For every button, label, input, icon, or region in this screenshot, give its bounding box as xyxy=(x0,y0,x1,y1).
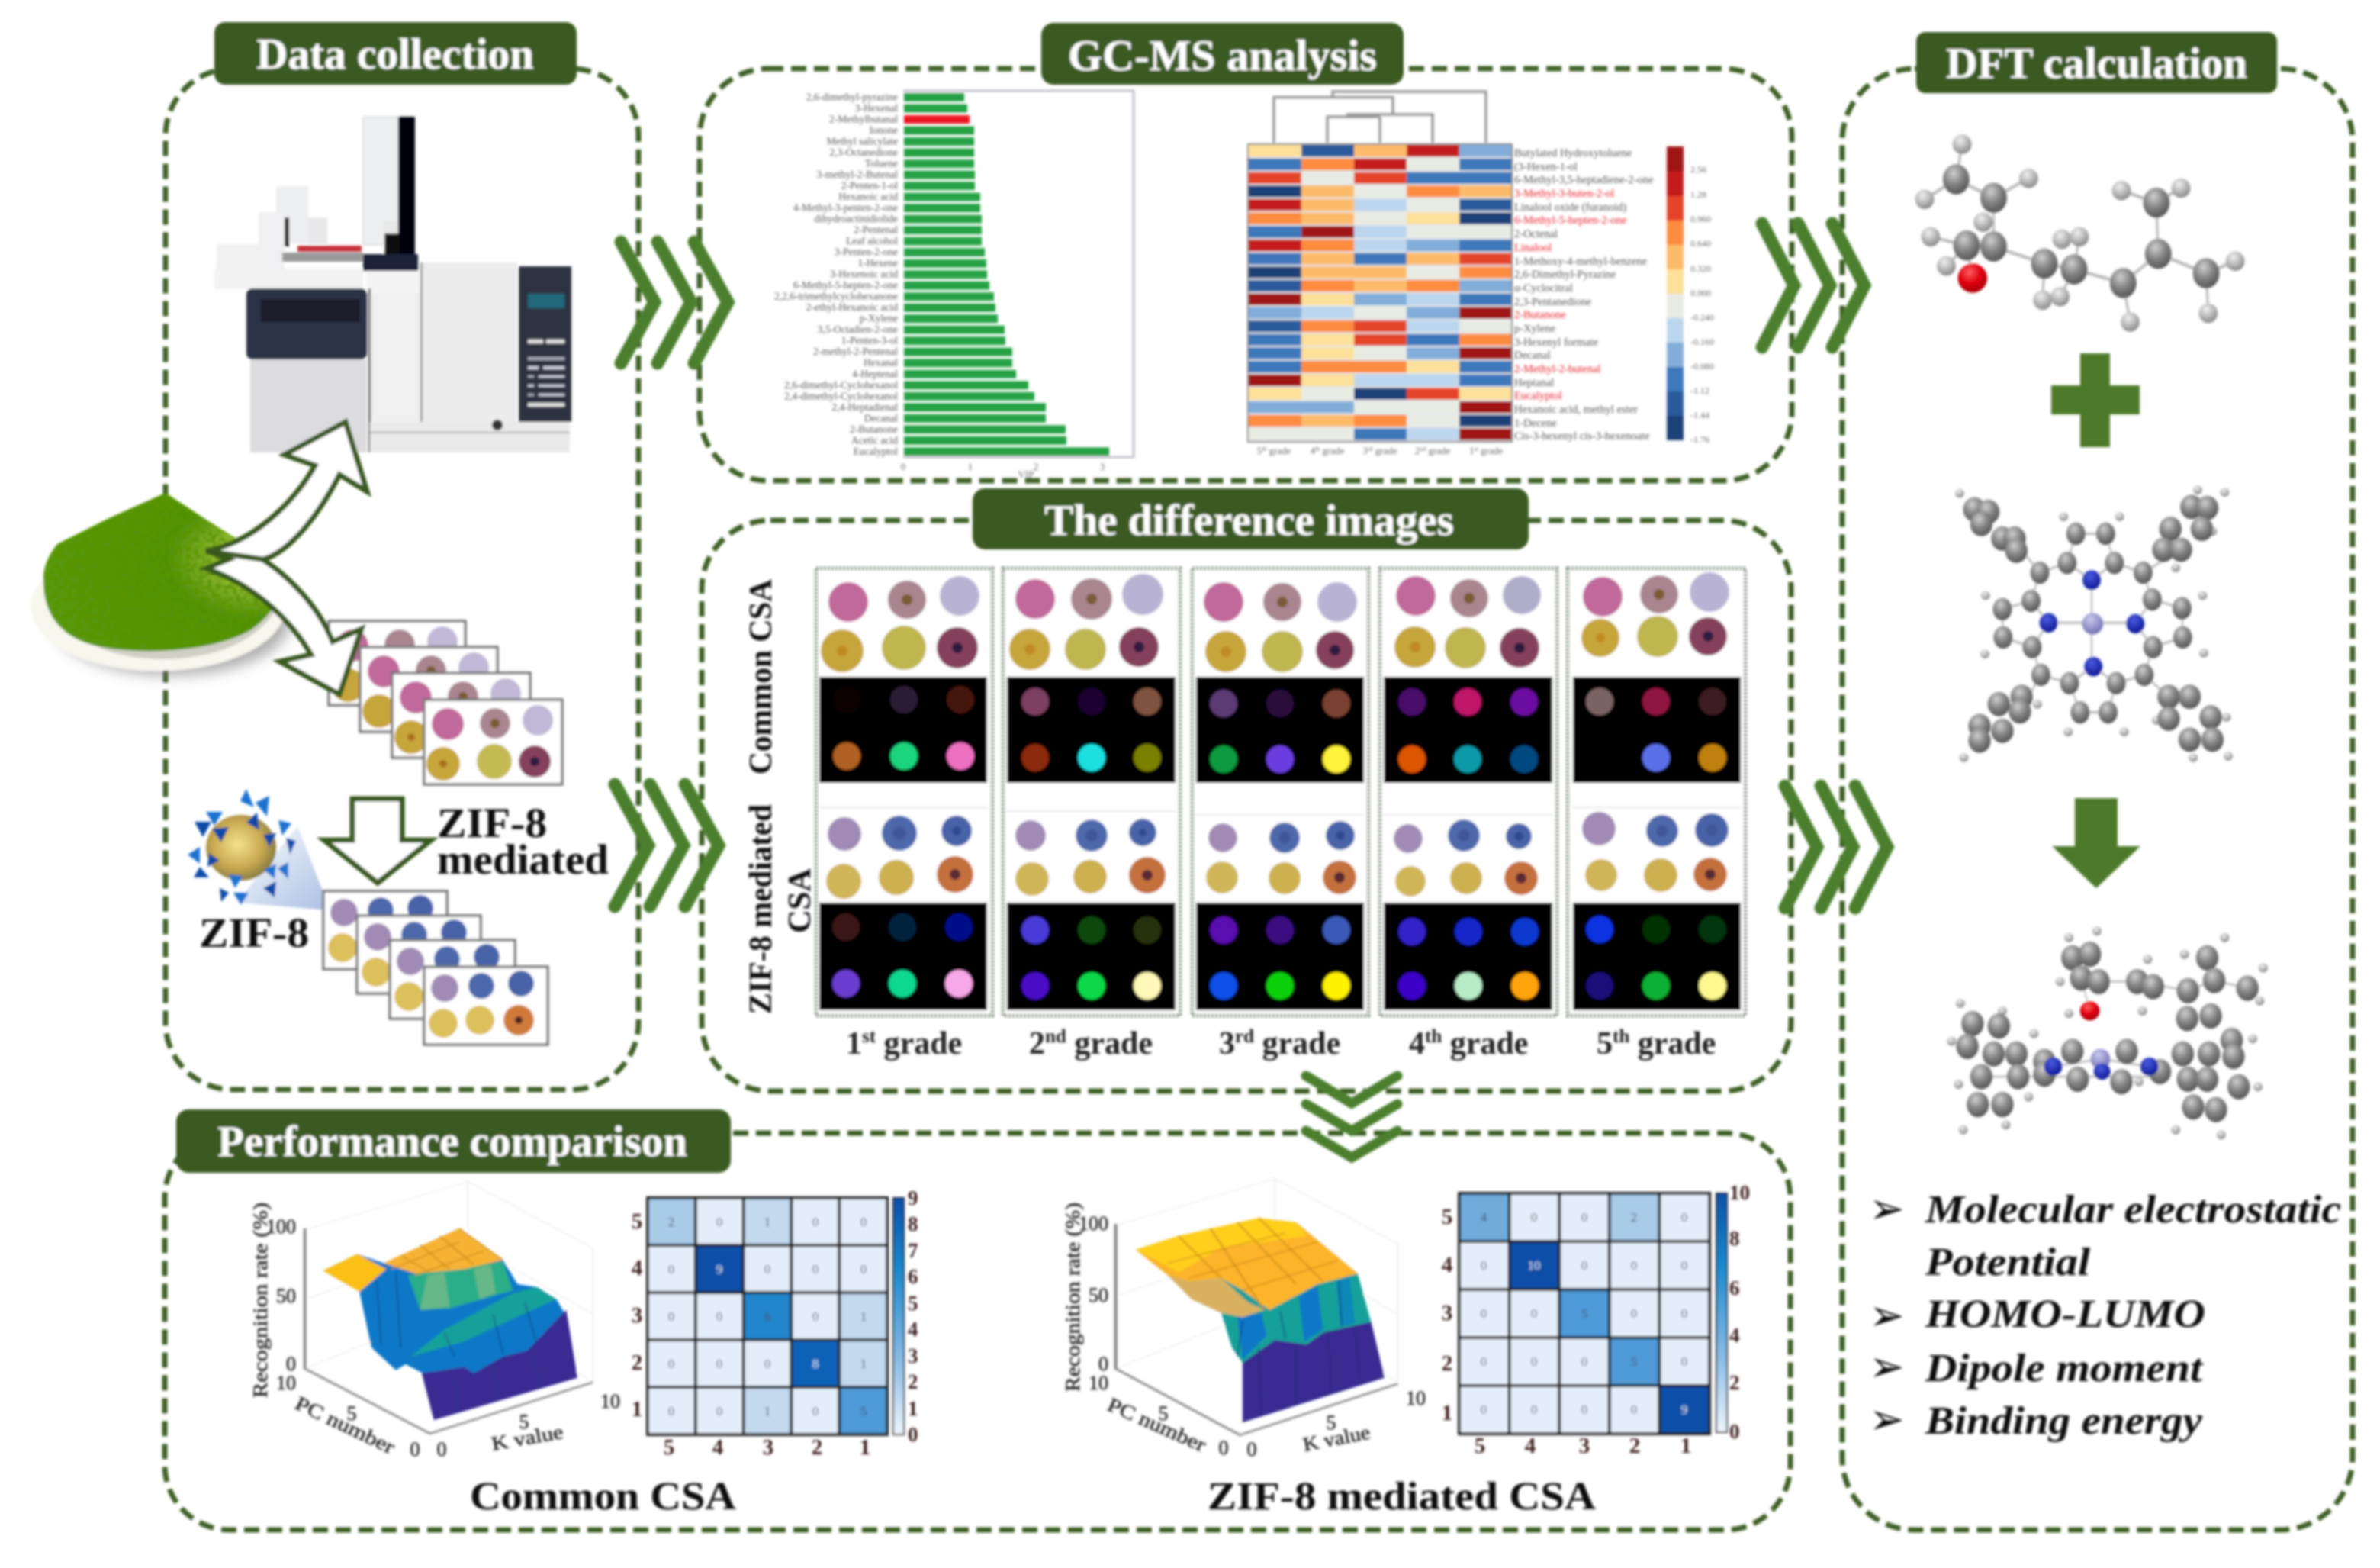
chart: VIP bar chart: 0 xyxy=(901,461,905,472)
chart: common CSA recognition surface: 100 xyxy=(266,1215,296,1238)
arrow: powder to colour arrays xyxy=(206,551,562,784)
side label: ZIF-8 mediated CSA xyxy=(744,804,818,1014)
icon: matcha powder in bowl xyxy=(31,493,290,675)
chart: heatmap with dendrogram: Linalool xyxy=(1514,242,1552,254)
chart: ZIF-8 CSA recognition surface: 0 xyxy=(1219,1437,1228,1459)
chart: ZIF-8 CSA recognition surface: 10 xyxy=(1089,1372,1108,1394)
chart: VIP bar chart: 2,3-Octanedione xyxy=(829,146,898,158)
list: DFT outputs: Binding energy xyxy=(1925,1399,2203,1443)
chart: VIP bar chart: Eucalyptol xyxy=(854,446,898,457)
chart: common CSA recognition surface xyxy=(249,1182,620,1460)
chart: VIP bar chart: Decanal xyxy=(864,412,898,423)
chart: ZIF-8 CSA recognition surface: 5 xyxy=(1326,1412,1336,1434)
chart: VIP bar chart: 3,5-Octadien-2-one xyxy=(818,324,898,335)
panel: DFT calculation xyxy=(1842,69,2353,1530)
chart: VIP bar chart: 3 xyxy=(1100,461,1105,472)
molecule: adsorption complex xyxy=(1947,926,2268,1139)
chart: ZIF-8 CSA confusion matrix: 0 xyxy=(1481,1258,1487,1273)
colour scale: -0.160 xyxy=(1690,336,1714,347)
chart: common CSA recognition surface: PC number xyxy=(291,1392,398,1459)
chart: common CSA confusion matrix: 7 xyxy=(908,1239,918,1262)
chart: heatmap with dendrogram: 2 xyxy=(1415,445,1420,456)
chart: common CSA confusion matrix: 1 xyxy=(764,1404,770,1418)
grade labels: grade xyxy=(1442,1026,1528,1061)
chart: common CSA confusion matrix: 0 xyxy=(668,1357,674,1371)
arrow: difference images to performance xyxy=(1306,1076,1397,1157)
chart: ZIF-8 CSA confusion matrix xyxy=(1442,1181,1750,1458)
chart: common CSA confusion matrix: 0 xyxy=(764,1357,770,1371)
heading: DFT calculation: DFT calculation xyxy=(1946,40,2247,88)
chart: common CSA confusion matrix: 5 xyxy=(860,1404,867,1418)
arrow: difference images to DFT xyxy=(1785,786,1887,908)
chart: VIP bar chart: Hexanoic acid xyxy=(838,191,898,202)
chart: heatmap with dendrogram: 1 xyxy=(1469,445,1475,456)
chart: common CSA confusion matrix: 0 xyxy=(812,1215,819,1229)
grade labels: grade xyxy=(1254,1026,1340,1061)
arrow: powder to instrument xyxy=(206,422,367,559)
dendrogram xyxy=(1274,92,1486,145)
chart: VIP bar chart xyxy=(774,91,1134,480)
arrow: down to complex xyxy=(2052,798,2140,888)
list: DFT outputs: ➢ xyxy=(1869,1184,1905,1234)
chart: common CSA confusion matrix: 0 xyxy=(860,1262,867,1277)
chart: VIP bar chart: 2 xyxy=(1034,461,1038,472)
chart: heatmap with dendrogram: α-Cyclocitral xyxy=(1514,282,1573,295)
chart: VIP bar chart: dihydroactinidiolide xyxy=(815,213,898,224)
difference image column: 5th grade xyxy=(1568,568,1745,1016)
chart: common CSA confusion matrix: 4 xyxy=(632,1256,642,1280)
chart: common CSA recognition surface: 50 xyxy=(276,1285,296,1307)
panel: GC-MS analysis xyxy=(700,69,1792,481)
chart: common CSA confusion matrix: 1 xyxy=(860,1435,870,1460)
chart: VIP bar chart: VIP xyxy=(1018,468,1034,480)
chart: common CSA confusion matrix: 4 xyxy=(908,1318,918,1341)
heading: Performance comparison xyxy=(176,1109,731,1173)
chart: ZIF-8 CSA recognition surface: 0 xyxy=(1246,1438,1257,1460)
chart: heatmap with dendrogram: Linalool oxide (furanoid) xyxy=(1514,201,1627,214)
heading: Data collection xyxy=(214,22,577,85)
chart: heatmap with dendrogram: 6-Methyl-3,5-heptadiene-2-one xyxy=(1514,174,1653,186)
chart: heatmap with dendrogram: Heptanal xyxy=(1514,377,1554,389)
chart: ZIF-8 CSA confusion matrix: 0 xyxy=(1631,1306,1637,1321)
chart: ZIF-8 CSA confusion matrix: 10 xyxy=(1729,1181,1750,1204)
chart: common CSA confusion matrix: 0 xyxy=(716,1357,722,1371)
chart: VIP bar chart: 2,6-dimethyl-Cyclohexanol xyxy=(784,379,898,391)
chart: VIP bar chart: 3-methyl-2-Butenal xyxy=(817,169,898,180)
colour scale: -0.080 xyxy=(1690,361,1714,372)
chart: ZIF-8 CSA confusion matrix: 5 xyxy=(1442,1205,1452,1229)
colour scale xyxy=(1667,146,1714,445)
chart: VIP bar chart: 2-ethyl-Hexanoic acid xyxy=(806,301,898,313)
list: DFT outputs: ➢ xyxy=(1869,1395,1905,1444)
chart: ZIF-8 CSA confusion matrix: 1 xyxy=(1680,1434,1691,1458)
chart: ZIF-8 CSA confusion matrix: 0 xyxy=(1681,1306,1687,1321)
list: DFT outputs: Dipole moment xyxy=(1925,1347,2204,1390)
difference image column: 2nd grade xyxy=(1003,568,1180,1016)
chart: ZIF-8 CSA confusion matrix: 0 xyxy=(1531,1210,1537,1225)
chart: ZIF-8 CSA confusion matrix: 0 xyxy=(1631,1258,1637,1273)
plate stack: common CSA xyxy=(329,621,562,784)
chart: ZIF-8 CSA confusion matrix: 2 xyxy=(1629,1434,1640,1458)
chart: heatmap with dendrogram: Eucalyptol xyxy=(1514,390,1562,402)
chart: common CSA confusion matrix: 1 xyxy=(908,1397,918,1420)
grade labels: grade xyxy=(1066,1026,1153,1061)
chart: common CSA confusion matrix: 6 xyxy=(908,1265,918,1288)
chart: VIP bar chart: 2,4-Heptadienal xyxy=(831,401,898,413)
chart: common CSA confusion matrix: 6 xyxy=(764,1309,770,1324)
plate stack: ZIF-8 mediated CSA xyxy=(323,891,548,1045)
chart: heatmap with dendrogram: Decanal xyxy=(1514,349,1550,362)
grade labels: nd xyxy=(1045,1026,1066,1047)
chart: ZIF-8 CSA recognition surface xyxy=(1062,1179,1426,1460)
chart: heatmap with dendrogram: 2-Butanone xyxy=(1514,309,1566,321)
chart: common CSA confusion matrix: 0 xyxy=(812,1262,819,1277)
chart: heatmap with dendrogram: grade xyxy=(1478,445,1503,456)
heading: The difference images xyxy=(973,488,1529,549)
chart: heatmap with dendrogram: 2,6-Dimethyl-Pyrazine xyxy=(1514,269,1616,281)
label: ZIF-8: ZIF-8 xyxy=(199,910,309,956)
chart: heatmap with dendrogram: 2,3-Pentanedione xyxy=(1514,296,1591,308)
chart: common CSA confusion matrix: 0 xyxy=(812,1404,819,1418)
chart: common CSA recognition surface: 10 xyxy=(276,1372,296,1394)
chart: common CSA confusion matrix: 2 xyxy=(908,1370,918,1393)
label: ZIF-8 mediated: ZIF-8 xyxy=(437,800,547,846)
chart: heatmap with dendrogram: grade xyxy=(1266,445,1291,456)
chart: ZIF-8 CSA confusion matrix: 4 xyxy=(1729,1324,1739,1347)
chart: VIP bar chart: 1 xyxy=(968,461,973,472)
chart: common CSA confusion matrix: 9 xyxy=(716,1262,722,1277)
chart: VIP bar chart: Methyl salicylate xyxy=(827,136,898,146)
chart: ZIF-8 CSA confusion matrix: 2 xyxy=(1631,1210,1637,1225)
chart: VIP bar chart: 2-Pentenal xyxy=(854,224,898,236)
icon: GC-MS instrument xyxy=(214,117,571,452)
chart: common CSA confusion matrix: 0 xyxy=(764,1262,770,1277)
difference image column: 3rd grade xyxy=(1192,568,1368,1016)
heading: The difference images: The difference images xyxy=(1044,497,1454,545)
colour scale: -1.12 xyxy=(1690,385,1709,396)
chart: heatmap with dendrogram: 3 xyxy=(1362,445,1368,456)
chart: VIP bar chart: 2,2,6-trimethylcyclohexanone xyxy=(774,291,898,302)
chart: common CSA confusion matrix: 3 xyxy=(908,1344,918,1367)
chart: common CSA confusion matrix: 5 xyxy=(908,1292,918,1315)
panel: performance comparison xyxy=(165,1133,1790,1530)
grade labels: 4 xyxy=(1409,1026,1425,1061)
chart: common CSA confusion matrix: 3 xyxy=(763,1435,774,1460)
chart: VIP bar chart: Ionone xyxy=(870,124,898,136)
label: ZIF-8 mediated: mediated xyxy=(437,836,609,883)
chart: VIP bar chart: 1-Hexene xyxy=(858,257,898,269)
grade labels: 2 xyxy=(1029,1026,1045,1061)
chart: VIP bar chart: 2,4-dimethyl-Cyclohexanol xyxy=(784,390,898,401)
grade labels: st xyxy=(862,1026,876,1047)
chart: common CSA confusion matrix: 0 xyxy=(860,1215,867,1229)
label: ZIF-8 mediated xyxy=(437,800,609,883)
grade labels xyxy=(846,1026,1716,1061)
chart: ZIF-8 CSA confusion matrix: 4 xyxy=(1481,1210,1488,1225)
side label: ZIF-8 mediated CSA: CSA xyxy=(783,868,818,933)
chart: common CSA confusion matrix: 0 xyxy=(716,1215,722,1229)
label: ZIF-8 mediated CSA: ZIF-8 mediated CSA xyxy=(1208,1475,1596,1518)
chart: ZIF-8 CSA confusion matrix: 10 xyxy=(1527,1258,1541,1273)
chart: heatmap with dendrogram: 4 xyxy=(1311,445,1315,456)
chart: ZIF-8 CSA confusion matrix: 3 xyxy=(1579,1434,1590,1458)
chart: VIP bar chart: 2-methyl-2-Pentenal xyxy=(813,346,898,357)
grade labels: th xyxy=(1613,1026,1629,1047)
icon: ZIF-8 nanoparticle xyxy=(188,789,330,910)
chart: ZIF-8 CSA confusion matrix: 1 xyxy=(1442,1401,1452,1425)
chart: heatmap with dendrogram: 5 xyxy=(1257,445,1262,456)
chart: common CSA confusion matrix: 2 xyxy=(632,1351,642,1375)
chart: common CSA confusion matrix: 3 xyxy=(632,1303,642,1328)
chart: common CSA confusion matrix: 2 xyxy=(812,1435,822,1460)
chart: ZIF-8 CSA confusion matrix: 0 xyxy=(1581,1402,1587,1417)
chart: ZIF-8 CSA recognition surface: Recognition rate (%) xyxy=(1062,1203,1084,1392)
chart: ZIF-8 CSA confusion matrix: 4 xyxy=(1442,1253,1452,1277)
chart: ZIF-8 CSA confusion matrix: 8 xyxy=(1729,1227,1739,1250)
chart: ZIF-8 CSA confusion matrix: 0 xyxy=(1681,1258,1687,1273)
colour scale: -1.44 xyxy=(1690,410,1709,420)
chart: heatmap with dendrogram: 2-Methyl-2-butenal xyxy=(1514,363,1601,375)
colour scale: -1.76 xyxy=(1690,434,1709,445)
chart: heatmap with dendrogram: th xyxy=(1315,446,1320,452)
icon: plus sign xyxy=(2051,353,2140,447)
chart: common CSA confusion matrix: 1 xyxy=(860,1309,867,1324)
chart: VIP bar chart: 3-Penten-2-one xyxy=(835,246,898,258)
side label: ZIF-8 mediated CSA: ZIF-8 mediated xyxy=(744,804,779,1014)
grade labels: grade xyxy=(1629,1026,1716,1061)
chart: ZIF-8 CSA confusion matrix: 0 xyxy=(1531,1354,1537,1369)
chart: ZIF-8 CSA confusion matrix: 0 xyxy=(1581,1210,1587,1225)
chart: heatmap with dendrogram: p-Xylene xyxy=(1514,323,1555,335)
difference image column: 1st grade xyxy=(816,568,992,1016)
chart: ZIF-8 CSA recognition surface: K value xyxy=(1301,1421,1372,1456)
label: Common CSA: Common CSA xyxy=(470,1475,736,1518)
heading: GC-MS analysis: GC-MS analysis xyxy=(1068,32,1377,80)
colour scale: 0.000 xyxy=(1690,288,1711,298)
chart: heatmap with dendrogram: 2-Octenal xyxy=(1514,228,1558,240)
panel: data collection xyxy=(166,69,638,1090)
arrow: data collection to difference images xyxy=(615,784,719,906)
chart: common CSA confusion matrix: 0 xyxy=(716,1404,722,1418)
heading: Data collection: Data collection xyxy=(256,31,534,79)
chart: ZIF-8 CSA confusion matrix: 5 xyxy=(1475,1434,1485,1458)
chart: VIP bar chart: 2-Penten-1-ol xyxy=(841,180,898,192)
chart: heatmap with dendrogram: 1-Methoxy-4-methyl-benzene xyxy=(1514,256,1647,268)
chart: heatmap with dendrogram: Butylated Hydroxytoluene xyxy=(1514,147,1632,159)
chart: VIP bar chart: Toluene xyxy=(865,158,898,169)
chart: heatmap with dendrogram: 3-Methyl-3-buten-2-ol xyxy=(1514,188,1614,200)
colour scale: 0.640 xyxy=(1690,238,1711,249)
chart: ZIF-8 CSA confusion matrix: 6 xyxy=(1729,1277,1739,1299)
list: DFT outputs: Molecular electrostatic xyxy=(1925,1188,2341,1232)
chart: heatmap with dendrogram: Hexanoic acid, methyl ester xyxy=(1514,404,1638,416)
grade labels: rd xyxy=(1235,1026,1254,1047)
chart: VIP bar chart: Leaf alcohol xyxy=(846,235,898,246)
chart: ZIF-8 CSA confusion matrix: 0 xyxy=(1581,1354,1587,1369)
chart: common CSA confusion matrix xyxy=(632,1186,918,1460)
chart: heatmap with dendrogram: nd xyxy=(1420,446,1426,452)
chart: common CSA confusion matrix: 8 xyxy=(908,1212,918,1235)
grade labels: grade xyxy=(876,1026,962,1061)
chart: heatmap with dendrogram: grade xyxy=(1373,445,1397,456)
chart: common CSA confusion matrix: 0 xyxy=(716,1309,722,1324)
chart: ZIF-8 CSA confusion matrix: 5 xyxy=(1631,1354,1637,1369)
chart: VIP bar chart: p-Xylene xyxy=(860,313,898,324)
chart: VIP bar chart: 2,6-dimethyl-pyrazine xyxy=(806,92,898,102)
chart: VIP bar chart: 4-Methyl-3-penten-2-one xyxy=(793,202,898,214)
chart: common CSA recognition surface: 5 xyxy=(346,1402,357,1425)
chart: common CSA confusion matrix: 0 xyxy=(668,1262,674,1277)
chart: common CSA confusion matrix: 1 xyxy=(632,1397,642,1422)
chart: common CSA confusion matrix: 5 xyxy=(664,1435,674,1460)
chart: ZIF-8 CSA recognition surface: 50 xyxy=(1089,1284,1108,1306)
chart: VIP bar chart: Hexanal xyxy=(864,357,898,369)
arrow: GC-MS to DFT xyxy=(1762,224,1864,347)
chart: ZIF-8 CSA confusion matrix: 4 xyxy=(1525,1434,1536,1458)
chart: heatmap with dendrogram: grade xyxy=(1320,445,1345,456)
chart: ZIF-8 CSA recognition surface: PC number xyxy=(1105,1393,1210,1457)
grade labels: 1 xyxy=(846,1026,862,1061)
chart: heatmap with dendrogram: grade xyxy=(1426,445,1451,456)
chart: VIP bar chart: 4-Heptenal xyxy=(852,368,898,379)
chart: common CSA recognition surface: Recognition rate (%) xyxy=(249,1203,272,1398)
list: DFT outputs: Potential xyxy=(1925,1241,2091,1284)
chart: heatmap with dendrogram: 6-Methyl-5-hepten-2-one xyxy=(1514,214,1626,227)
chart: heatmap with dendrogram: Cis-3-hexenyl cis-3-hexenoate xyxy=(1514,430,1650,443)
chart: common CSA recognition surface: 10 xyxy=(600,1390,620,1412)
chart: common CSA confusion matrix: 2 xyxy=(668,1215,674,1229)
chart: ZIF-8 CSA confusion matrix: 9 xyxy=(1681,1402,1687,1417)
chart: heatmap with dendrogram: st xyxy=(1475,446,1479,452)
chart: ZIF-8 CSA confusion matrix: 3 xyxy=(1442,1301,1452,1325)
list: DFT outputs: HOMO-LUMO xyxy=(1925,1293,2205,1336)
list: DFT outputs: ➢ xyxy=(1869,1291,1905,1341)
chart: ZIF-8 CSA confusion matrix: 0 xyxy=(1631,1402,1637,1417)
chart: common CSA confusion matrix: 8 xyxy=(812,1357,819,1371)
grade labels: 5 xyxy=(1597,1026,1613,1061)
chart: common CSA confusion matrix: 4 xyxy=(712,1435,723,1460)
grade labels: 3 xyxy=(1219,1026,1235,1061)
chart: heatmap with dendrogram xyxy=(1248,92,1714,456)
chart: ZIF-8 CSA recognition surface: 5 xyxy=(1158,1402,1169,1425)
chart: VIP bar chart: 2-Butanone xyxy=(850,423,898,435)
chart: heatmap with dendrogram: (3-Hexen-1-ol xyxy=(1514,161,1578,173)
list: DFT outputs: ➢ xyxy=(1869,1342,1905,1392)
chart: heatmap with dendrogram: 3-Hexenyl formate xyxy=(1514,336,1598,349)
chart: VIP bar chart: 6-Methyl-5-hepten-2-one xyxy=(793,279,898,291)
colour scale: 2.56 xyxy=(1690,164,1706,175)
arrow: data collection to GC-MS xyxy=(621,242,728,363)
arrow: ZIF-8 mediation xyxy=(324,799,431,883)
chart: ZIF-8 CSA confusion matrix: 2 xyxy=(1442,1351,1452,1376)
heading: DFT calculation xyxy=(1916,32,2277,93)
chart: ZIF-8 CSA recognition surface: 10 xyxy=(1406,1387,1426,1409)
chart: common CSA recognition surface: K value xyxy=(490,1421,565,1455)
chart: heatmap with dendrogram: th xyxy=(1262,446,1266,452)
chart: common CSA confusion matrix: 0 xyxy=(812,1309,819,1324)
chart: heatmap with dendrogram: rd xyxy=(1368,446,1373,452)
chart: common CSA confusion matrix: 0 xyxy=(908,1423,918,1446)
chart: ZIF-8 CSA confusion matrix: 0 xyxy=(1531,1402,1537,1417)
chart: common CSA confusion matrix: 5 xyxy=(632,1209,642,1234)
chart: common CSA recognition surface: 0 xyxy=(436,1438,447,1460)
chart: VIP bar chart: 3-Hexenal xyxy=(855,102,898,114)
colour scale: -0.240 xyxy=(1690,312,1714,323)
chart: ZIF-8 CSA confusion matrix: 0 xyxy=(1681,1210,1687,1225)
chart: VIP bar chart: Acetic acid xyxy=(851,434,898,446)
heading: GC-MS analysis xyxy=(1041,23,1404,85)
colour scale: 1.28 xyxy=(1690,189,1706,200)
chart: heatmap with dendrogram: 1-Decene xyxy=(1514,417,1557,430)
chart: ZIF-8 CSA confusion matrix: 0 xyxy=(1681,1354,1687,1369)
chart: ZIF-8 CSA recognition surface: 0 xyxy=(1098,1353,1108,1375)
grade labels: th xyxy=(1425,1026,1442,1047)
chart: common CSA confusion matrix: 0 xyxy=(668,1404,674,1418)
chart: ZIF-8 CSA recognition surface: 100 xyxy=(1079,1212,1108,1235)
chart: ZIF-8 CSA confusion matrix: 0 xyxy=(1729,1420,1739,1443)
chart: VIP bar chart: 3-Hexenoic acid xyxy=(830,269,898,280)
chart: VIP bar chart: 2-Methylbutanal xyxy=(829,113,898,125)
colour scale: 0.960 xyxy=(1690,214,1711,224)
chart: ZIF-8 CSA confusion matrix: 2 xyxy=(1729,1371,1739,1394)
chart: ZIF-8 CSA confusion matrix: 0 xyxy=(1581,1258,1587,1273)
chart: ZIF-8 CSA confusion matrix: 0 xyxy=(1481,1354,1487,1369)
molecule: zinc porphyrin xyxy=(1955,485,2233,762)
chart: common CSA confusion matrix: 9 xyxy=(908,1186,918,1209)
chart: ZIF-8 CSA confusion matrix: 0 xyxy=(1481,1306,1487,1321)
side label: Common CSA: Common CSA xyxy=(744,578,779,774)
chart: ZIF-8 CSA confusion matrix: 0 xyxy=(1481,1402,1487,1417)
chart: common CSA recognition surface: 0 xyxy=(410,1438,420,1460)
difference image column: 4th grade xyxy=(1380,568,1557,1016)
chart: VIP bar chart: 1-Penten-3-ol xyxy=(841,335,898,346)
list: DFT outputs xyxy=(1869,1184,2341,1444)
heading: Performance comparison: Performance comparison xyxy=(217,1118,687,1166)
molecule: eucalyptol-like analyte xyxy=(1915,134,2245,332)
chart: common CSA recognition surface: 0 xyxy=(286,1353,296,1375)
chart: ZIF-8 CSA confusion matrix: 0 xyxy=(1531,1306,1537,1321)
chart: common CSA recognition surface: 5 xyxy=(519,1411,529,1433)
colour scale: 0.320 xyxy=(1690,263,1711,274)
chart: ZIF-8 CSA confusion matrix: 5 xyxy=(1581,1306,1587,1321)
chart: common CSA confusion matrix: 1 xyxy=(860,1357,867,1371)
panel: difference images xyxy=(702,520,1791,1091)
chart: common CSA confusion matrix: 0 xyxy=(668,1309,674,1324)
chart: common CSA confusion matrix: 1 xyxy=(764,1215,770,1229)
